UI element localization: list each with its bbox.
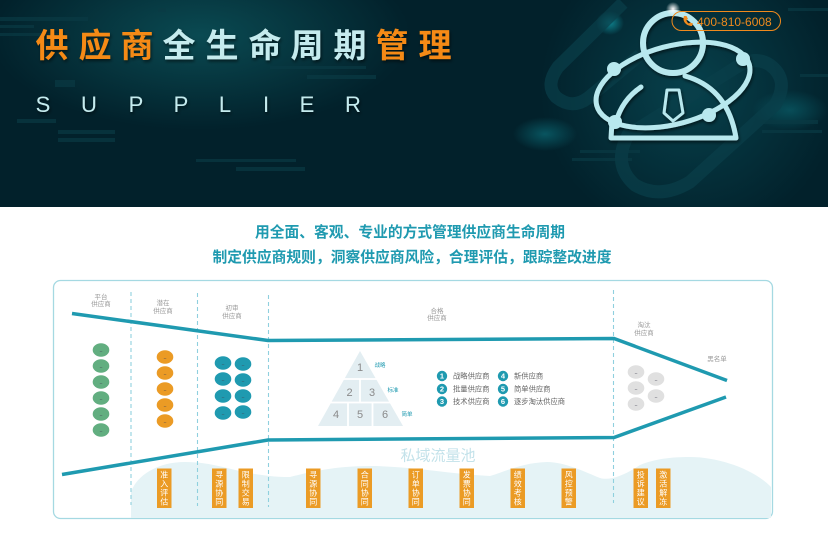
headline: 制定供应商规则，洞察供应商风险，合理评估，跟踪整改进度 <box>212 248 612 266</box>
process tags: 绩 <box>514 470 522 480</box>
platform suppliers: green dots <box>93 343 109 437</box>
phone pill: 400-810-6008 <box>697 15 772 29</box>
process tags: 诉 <box>637 478 645 488</box>
process tags: 协 <box>412 488 420 498</box>
pyramid: 1 <box>357 362 363 374</box>
pyramid: 4 <box>333 409 339 421</box>
subtitle: SUPPLIER: L <box>219 92 231 117</box>
dot captions: .. <box>654 394 658 400</box>
dot captions: .. <box>241 410 245 416</box>
stage labels: 供应商 <box>91 299 111 308</box>
pyramid: 战略 <box>374 361 386 369</box>
legend: supplier types: 1 <box>440 372 444 381</box>
eliminated suppliers: gray dots <box>628 365 664 411</box>
dot captions <box>99 348 658 434</box>
dashed stage dividers <box>131 290 614 507</box>
process tags: 寻 <box>309 470 317 480</box>
subtitle: SUPPLIER <box>36 92 361 117</box>
dot captions: .. <box>634 386 638 392</box>
dot captions: .. <box>221 411 225 417</box>
pyramid: 5 <box>357 409 363 421</box>
title: 全 <box>162 27 196 64</box>
headline: 用全面、客观、专业的方式管理供应商生命周期 <box>255 223 565 241</box>
process tags: 冻 <box>659 496 667 506</box>
process tags: 源 <box>215 480 223 488</box>
process tags: 协 <box>463 488 471 498</box>
pyramid: 3 <box>369 387 375 399</box>
process tags: 预 <box>565 488 573 498</box>
process tags: 协 <box>215 488 223 498</box>
process tags: 同 <box>215 498 223 506</box>
dot captions: .. <box>241 378 245 384</box>
legend: supplier types: 新供应商 <box>514 372 543 380</box>
title: 命 <box>248 27 282 64</box>
process tags: 效 <box>514 478 522 488</box>
process tags: 寻 <box>215 470 223 480</box>
dot captions: .. <box>241 394 245 400</box>
pyramid: 简单 <box>401 410 413 418</box>
legend: supplier types <box>437 371 565 407</box>
process tags: 考 <box>514 488 522 498</box>
dot captions: .. <box>99 412 103 418</box>
stage labels <box>91 292 727 363</box>
process tags: 源 <box>309 480 317 488</box>
stage labels: 初审 <box>226 303 238 312</box>
reviewed suppliers: teal dots <box>215 356 251 420</box>
legend: supplier types: 批量供应商 <box>453 384 489 394</box>
pyramid: 标准 <box>387 386 399 394</box>
process tags: 估 <box>160 496 168 506</box>
process tags: 交 <box>242 488 250 498</box>
title: 供 <box>36 27 68 64</box>
legend: supplier types: 5 <box>501 385 505 394</box>
subtitle: SUPPLIER: E <box>300 92 314 117</box>
process tags: 议 <box>637 498 645 506</box>
title: 生 <box>206 27 238 64</box>
dot captions: .. <box>99 396 103 402</box>
process tags: 制 <box>242 478 250 488</box>
title: 理 <box>418 27 452 64</box>
pool label: 私域流量池 <box>400 448 476 464</box>
process tags: 同 <box>412 498 420 506</box>
dot captions: .. <box>221 361 225 367</box>
process tags: 同 <box>361 498 369 506</box>
panel: lifecycle funnel <box>54 280 772 518</box>
dot captions: .. <box>99 364 103 370</box>
process tags: 警 <box>565 496 573 506</box>
stage labels: 合格 <box>430 306 444 315</box>
legend: supplier types: 6 <box>501 397 505 406</box>
process tags: 风 <box>565 470 573 480</box>
process tags: 易 <box>242 498 250 506</box>
wave: private traffic pool <box>131 457 771 518</box>
legend: supplier types: 3 <box>440 397 444 406</box>
dot captions: .. <box>241 362 245 368</box>
potential suppliers: orange dots <box>157 350 173 428</box>
legend: supplier types: 技术供应商 <box>453 397 489 406</box>
process tags: 限 <box>242 470 250 480</box>
legend: supplier types: 简单供应商 <box>514 384 550 394</box>
process tags: 入 <box>160 480 168 488</box>
title <box>36 27 452 64</box>
title: 周 <box>290 27 324 64</box>
title: 商 <box>120 27 154 64</box>
process tags: 核 <box>514 496 522 506</box>
process tags: 评 <box>160 488 168 498</box>
process tags: 票 <box>463 480 471 488</box>
subtitle: SUPPLIER: S <box>36 92 50 117</box>
process tags: 单 <box>412 478 420 488</box>
title: 管 <box>376 27 408 64</box>
legend: supplier types: 2 <box>440 385 444 394</box>
dot captions: .. <box>163 371 167 377</box>
stage labels: 潜在 <box>156 298 170 307</box>
dot captions: .. <box>634 370 638 376</box>
process tags: 合 <box>361 470 369 480</box>
stage labels: 供应商 <box>153 306 173 315</box>
stage labels: 供应商 <box>427 313 447 322</box>
subtitle: SUPPLIER: P <box>129 92 143 117</box>
dot captions: .. <box>99 428 103 434</box>
process tags: 活 <box>659 478 667 488</box>
stage labels: 淘汰 <box>638 320 651 329</box>
process tags: 同 <box>309 498 317 506</box>
process tags: 激 <box>659 470 667 480</box>
process tags: 同 <box>463 498 471 506</box>
process tags: 建 <box>637 488 645 498</box>
process tags: 订 <box>412 470 420 480</box>
process tags: 投 <box>637 470 645 480</box>
icon: phone <box>683 16 693 26</box>
process tags: 发 <box>463 470 471 480</box>
process tags <box>157 468 670 508</box>
dot captions: .. <box>163 387 167 393</box>
pyramid: 6 <box>382 409 388 421</box>
process tags: 解 <box>659 488 667 498</box>
legend: supplier types: 4 <box>501 372 506 381</box>
dot captions: .. <box>634 402 638 408</box>
process tags: 协 <box>309 488 317 498</box>
process tags: 控 <box>565 478 573 488</box>
legend: supplier types: 战略供应商 <box>453 372 489 380</box>
dot captions: .. <box>99 380 103 386</box>
subtitle: SUPPLIER: I <box>263 92 269 117</box>
icon: supplier person with orbit <box>587 13 759 143</box>
dot captions: .. <box>99 348 103 354</box>
subtitle: SUPPLIER: R <box>345 92 361 117</box>
headline <box>212 223 612 266</box>
hero banner <box>0 0 828 207</box>
title: 应 <box>78 27 112 64</box>
funnel outline <box>62 314 727 474</box>
stage labels: 供应商 <box>634 328 654 337</box>
phone pill <box>672 12 780 30</box>
process tags: 准 <box>160 470 168 480</box>
dot captions: .. <box>163 355 167 361</box>
dot captions: .. <box>163 419 167 425</box>
subtitle: SUPPLIER: U <box>81 92 97 117</box>
dot captions: .. <box>221 394 225 400</box>
dot captions: .. <box>163 403 167 409</box>
title: 期 <box>334 27 366 64</box>
stage labels: 黑名单 <box>707 354 727 363</box>
dot captions: .. <box>654 377 658 383</box>
subtitle: SUPPLIER: P <box>174 92 188 117</box>
stage labels: 平台 <box>94 292 108 301</box>
pyramid <box>310 351 413 426</box>
dot captions: .. <box>221 377 225 383</box>
stage labels: 供应商 <box>222 311 242 320</box>
legend: supplier types: 逐步淘汰供应商 <box>514 397 565 406</box>
process tags: 协 <box>361 488 369 498</box>
pyramid: 2 <box>346 387 353 399</box>
process tags: 同 <box>361 480 369 488</box>
